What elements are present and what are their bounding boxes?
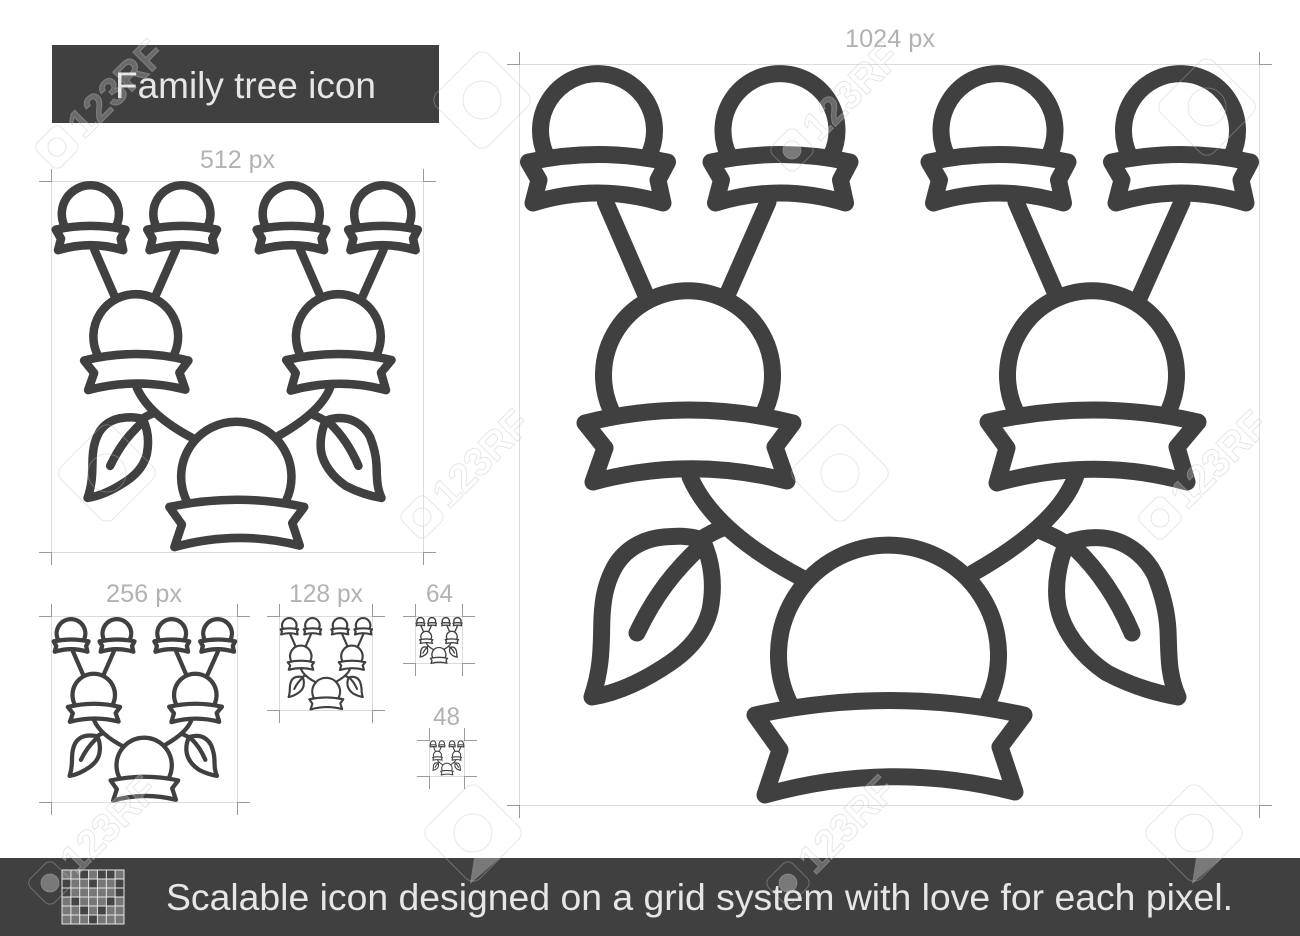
icon: pixel grid <box>62 870 124 924</box>
title banner <box>52 45 439 123</box>
leaf left <box>592 528 723 697</box>
bottom head <box>755 545 1024 795</box>
branch right <box>973 473 1077 573</box>
branch left <box>690 477 802 578</box>
middle head right <box>988 291 1198 483</box>
footer caption: Scalable icon designed on a grid system with love for each pixel. <box>166 877 1233 918</box>
size label: 128 px: 128 px <box>289 580 363 608</box>
top head 2 <box>711 74 850 293</box>
middle head left <box>585 291 793 482</box>
top head 1 <box>528 74 668 293</box>
title banner: Family tree icon <box>115 65 376 106</box>
watermark stamps: 123RF <box>59 32 174 146</box>
family tree icon: 512 px <box>56 185 418 547</box>
watermark stamps: 123RF <box>790 768 905 882</box>
grid frame: 64 px <box>403 604 475 676</box>
family tree icon: 128 px <box>281 618 372 709</box>
family tree icon: 64 px <box>416 618 462 663</box>
footer bar <box>0 858 1300 936</box>
grid frame: 48 px <box>417 728 477 789</box>
grid frame: 128 px <box>267 604 385 723</box>
family tree icon: 1024 px <box>528 74 1250 795</box>
top head 4 <box>1112 74 1250 296</box>
watermark stamps: 123RF <box>424 402 539 516</box>
grid frame: 1024 px <box>507 52 1272 818</box>
grid frame: 256 px <box>39 604 250 815</box>
grid frame: 512 px <box>39 169 436 565</box>
watermark stamps: 123RF <box>794 35 909 149</box>
size label: 64: 64 <box>426 580 453 608</box>
top head 3 <box>929 74 1068 292</box>
size label: 512 px: 512 px <box>200 146 275 174</box>
family tree icon: 48 px <box>430 741 464 775</box>
size label: 48: 48 <box>433 703 460 731</box>
size label: 256 px: 256 px <box>106 580 183 608</box>
size label: 1024 px: 1024 px <box>845 25 936 53</box>
watermark stamps: 123RF <box>52 768 167 882</box>
leaf right <box>1043 532 1178 697</box>
watermark stamps: 123RF <box>1162 403 1277 517</box>
family tree icon: 256 px <box>54 619 235 801</box>
